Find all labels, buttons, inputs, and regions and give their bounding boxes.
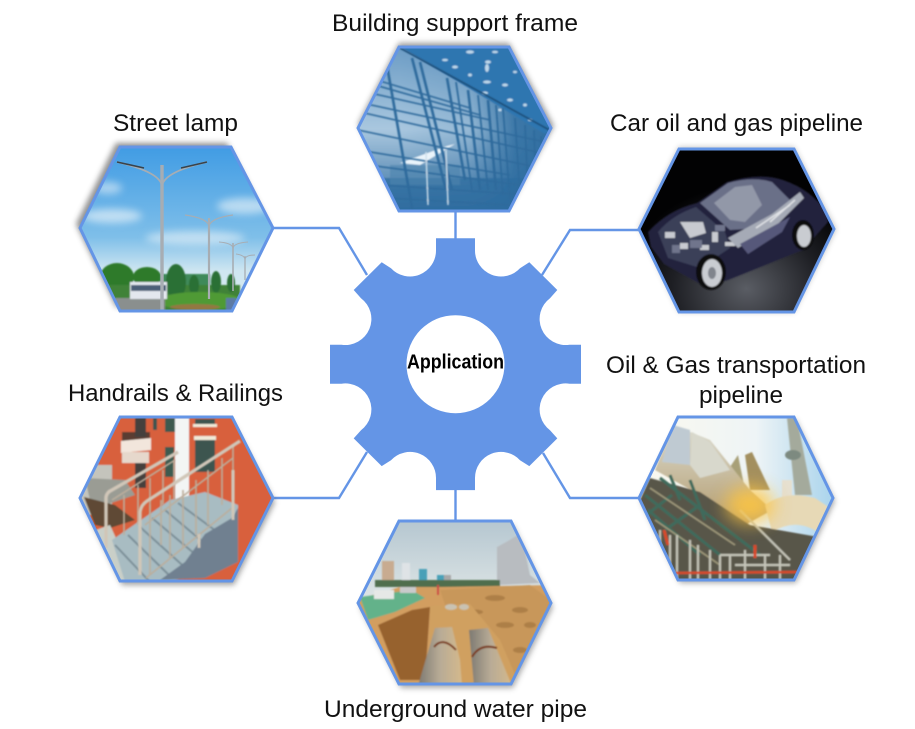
photo: stair handrails xyxy=(78,415,275,585)
label: oil and gas transportation pipeline: pipeline xyxy=(699,382,783,409)
label: car oil and gas pipeline: Car oil and gas pipeline xyxy=(610,110,863,137)
hexagon frame xyxy=(358,521,551,684)
panel: oil and gas transportation pipeline xyxy=(637,415,836,583)
label: handrails and railings: Handrails & Railings xyxy=(68,380,283,407)
hexagon frame xyxy=(639,417,833,580)
hexagon frame xyxy=(80,147,273,311)
panel: handrails and railings xyxy=(78,415,275,585)
photo: refinery xyxy=(637,415,836,582)
photo: street lamps xyxy=(78,145,275,313)
label: building support frame: Building support frame xyxy=(332,10,578,37)
photo: car cutaway xyxy=(637,147,836,314)
panel: street lamp xyxy=(76,143,275,313)
label: oil and gas transportation pipeline: Oil & Gas transportation xyxy=(606,352,866,379)
label: street lamp: Street lamp xyxy=(113,110,238,137)
central gear xyxy=(330,238,581,490)
photo: glass steel facade xyxy=(356,45,553,213)
hexagon frame xyxy=(358,47,551,211)
hexagon frame xyxy=(639,149,834,312)
panel: building support frame xyxy=(356,43,554,213)
panel: car oil and gas pipeline xyxy=(637,147,836,314)
gear label: Application xyxy=(407,352,504,374)
label: underground water pipe: Underground water pipe xyxy=(324,696,587,723)
photo: trench with pipes xyxy=(360,522,550,682)
panel: underground water pipe xyxy=(356,519,555,690)
hexagon frame xyxy=(80,417,273,581)
connector lines xyxy=(272,210,640,522)
label: oil and gas transportation pipeline xyxy=(606,352,866,409)
